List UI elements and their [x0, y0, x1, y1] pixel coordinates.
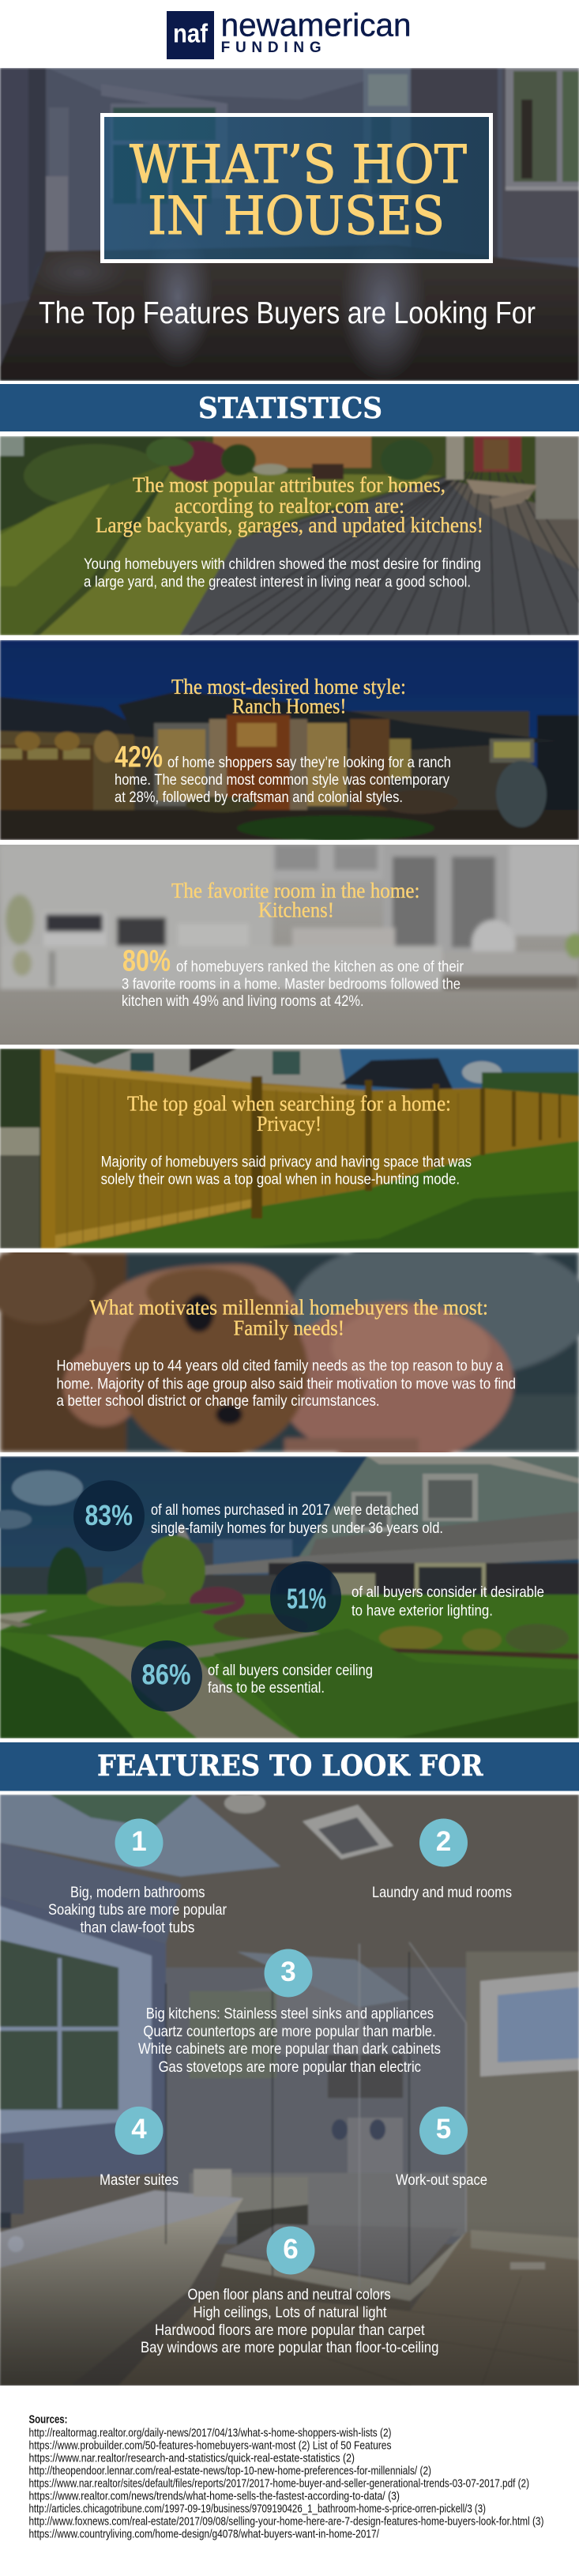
stat: 51%: 51%: [287, 1582, 326, 1615]
heading: Kitchens!: [258, 898, 334, 921]
source links: https://www.countryliving.com/home-design/g4078/what-buyers-want-in-home-2017/: [28, 2527, 380, 2540]
feature 1: [48, 1819, 227, 1937]
number badge 6: 6: [283, 2234, 299, 2265]
source links: http://theopendoor.lennar.com/real-estate-news/top-10-new-home-preferences-for-millennials/ (2): [28, 2464, 431, 2477]
panel: privacy: [0, 1049, 579, 1248]
body text: [57, 1358, 516, 1410]
title box: [103, 115, 491, 261]
source links: http://realtormag.realtor.org/daily-news/2017/04/13/what-s-home-shoppers-wish-lists (2): [28, 2426, 392, 2439]
title text: WHAT’S HOT: [130, 134, 467, 195]
body text: at 28%, followed by craftsman and colonial styles.: [115, 789, 403, 806]
feature 1 text: [48, 1884, 227, 1937]
logo mark square: naf: [173, 19, 209, 48]
number badge 5: 5: [436, 2114, 451, 2145]
feature 2 text: Laundry and mud rooms: [372, 1884, 512, 1901]
panel: family needs: [0, 1237, 579, 1463]
heading: The most popular attributes for homes,: [133, 473, 446, 497]
feature 6 text: High ceilings, Lots of natural light: [193, 2304, 387, 2322]
feature 3 text: White cabinets are more popular than dark cabinets: [138, 2040, 441, 2058]
feature 6 text: Open floor plans and neutral colors: [188, 2286, 391, 2303]
feature 1 text: than claw-foot tubs: [81, 1919, 195, 1937]
text: 51% detail: to have exterior lighting.: [352, 1602, 493, 1620]
heading: The most-desired home style:: [171, 675, 406, 699]
heading: What motivates millennial homebuyers the most:: [90, 1296, 488, 1320]
number badge 1: 1: [131, 1826, 147, 1857]
feature 3 text: [138, 2005, 441, 2076]
fence photo: [0, 1049, 579, 1248]
number badge 2: 2: [436, 1826, 451, 1857]
feature 6: [141, 2227, 438, 2356]
feature 6 text: Hardwood floors are more popular than carpet: [155, 2322, 425, 2339]
body text: solely their own was a top goal when in house-hunting mode.: [101, 1171, 460, 1188]
panel: features over bathroom photo: [0, 1793, 579, 2386]
body text: of home shoppers say they’re looking for a ranch: [167, 754, 451, 771]
body text: kitchen with 49% and living rooms at 42%.: [122, 992, 363, 1010]
feature 3 text: Gas stovetops are more popular than electric: [159, 2058, 421, 2076]
number badge 4: 4: [131, 2114, 147, 2145]
source links: https://www.probuilder.com/50-features-homebuyers-want-most (2) List of 50 Features: [28, 2439, 392, 2452]
sources list: [28, 2413, 543, 2540]
stat: 86%: [131, 1640, 202, 1712]
number badge 1: [115, 1819, 163, 1866]
number badge 3: [264, 1949, 313, 1998]
text: 83% detail: [151, 1501, 443, 1537]
backyard photo: [0, 436, 579, 635]
body text: a large yard, and the greatest interest in living near a good school.: [84, 574, 471, 591]
body text: home. The second most common style was contemporary: [115, 771, 449, 789]
ranch house photo: [0, 640, 579, 840]
body text: Majority of homebuyers said privacy and having space that was: [101, 1154, 472, 1171]
text: 86% detail: of all buyers consider ceiling: [208, 1662, 373, 1679]
body text: a better school district or change family circumstances.: [57, 1392, 380, 1410]
panel: ranch homes: [0, 640, 579, 841]
body text: of homebuyers ranked the kitchen as one of their: [176, 958, 464, 975]
text: 51% detail: [352, 1584, 544, 1620]
body text: Homebuyers up to 44 years old cited family needs as the top reason to buy a: [57, 1358, 503, 1375]
text: 83% detail: single-family homes for buyers under 36 years old.: [151, 1520, 443, 1537]
text: 86% detail: [208, 1662, 373, 1697]
number badge 6: [267, 2227, 314, 2274]
logo wordmark: newamerican: [221, 7, 412, 43]
text: 51% detail: of all buyers consider it desirable: [352, 1584, 544, 1601]
panel: popular attributes: [0, 436, 579, 635]
section banner: statistics: [0, 384, 579, 431]
heading: The favorite room in the home:: [171, 879, 420, 902]
feature 1 text: Soaking tubs are more popular: [48, 1901, 227, 1919]
hero panel: [0, 68, 579, 384]
section banner: features to look for: [0, 1742, 579, 1791]
feature 2: [372, 1819, 512, 1901]
body text: home. Majority of this age group also said their motivation to move was to find: [57, 1376, 516, 1393]
heading: [171, 675, 406, 718]
feature 5 text: Work-out space: [396, 2171, 487, 2189]
heading: The top goal when searching for a home:: [127, 1091, 451, 1115]
heading: Privacy!: [257, 1112, 321, 1135]
heading: according to realtor.com are:: [175, 494, 404, 518]
source links: https://www.realtor.com/news/trends/what-home-sells-the-fastest-according-to-data/ (3): [28, 2489, 400, 2503]
stat: 42%: 42%: [115, 740, 163, 774]
panel: percentages over neighborhood: [0, 1456, 579, 1738]
feature 6 text: Bay windows are more popular than floor-to-ceiling: [141, 2339, 438, 2356]
body text: 3 favorite rooms in a home. Master bedrooms followed the: [122, 975, 461, 992]
heading: [90, 1296, 488, 1339]
heading: Family needs!: [234, 1316, 344, 1339]
body text: [115, 754, 451, 806]
feature 1 text: Big, modern bathrooms: [70, 1884, 205, 1901]
sources heading: Sources:: [28, 2413, 68, 2427]
title text: [130, 134, 467, 247]
source links: [28, 2426, 543, 2540]
number badge 2: [419, 1819, 468, 1866]
heading: [96, 473, 483, 537]
stat: 83%: [73, 1480, 145, 1551]
stat: 51%: [270, 1561, 341, 1633]
feature 4: [100, 2107, 179, 2189]
stat: 86%: 86%: [142, 1658, 191, 1690]
heading: Ranch Homes!: [232, 695, 346, 718]
body text: Young homebuyers with children showed the most desire for finding: [84, 555, 481, 573]
banner heading: STATISTICS: [198, 392, 382, 425]
feature 3: [138, 1949, 441, 2076]
bathroom photo: [0, 1795, 579, 2386]
number badge 3: 3: [280, 1956, 296, 1987]
sleeping baby photo: [0, 1252, 579, 1452]
source links: https://www.nar.realtor/research-and-statistics/quick-real-estate-statistics (2): [28, 2451, 355, 2465]
feature 3 text: Quartz countertops are more popular than marble.: [143, 2023, 436, 2040]
stat: 83%: 83%: [85, 1499, 133, 1531]
feature 6 text: [141, 2286, 438, 2356]
heading: Large backyards, garages, and updated kitchens!: [96, 514, 483, 537]
neighborhood photo: [0, 1456, 579, 1738]
panel: kitchens: [0, 845, 579, 1045]
feature 3 text: Big kitchens: Stainless steel sinks and appliances: [146, 2005, 434, 2023]
text: 83% detail: of all homes purchased in 2017 were detached: [151, 1501, 419, 1519]
feature 4 text: Master suites: [100, 2171, 179, 2189]
kitchen photo: [0, 845, 579, 1045]
logo subtitle: FUNDING: [221, 40, 321, 56]
body text: [84, 555, 481, 591]
logo mark square: [167, 11, 214, 59]
logo: New American Funding: [167, 7, 412, 59]
heading: [171, 879, 420, 921]
heading: [127, 1091, 451, 1135]
title text: IN HOUSES: [148, 186, 445, 247]
stat: 80%: 80%: [122, 945, 171, 978]
banner heading: FEATURES TO LOOK FOR: [97, 1749, 484, 1783]
hero background: empty room photo: [0, 68, 579, 381]
feature 5: [396, 2107, 487, 2189]
body text: [101, 1154, 472, 1188]
body text: [122, 958, 464, 1010]
text: 86% detail: fans to be essential.: [208, 1679, 325, 1697]
